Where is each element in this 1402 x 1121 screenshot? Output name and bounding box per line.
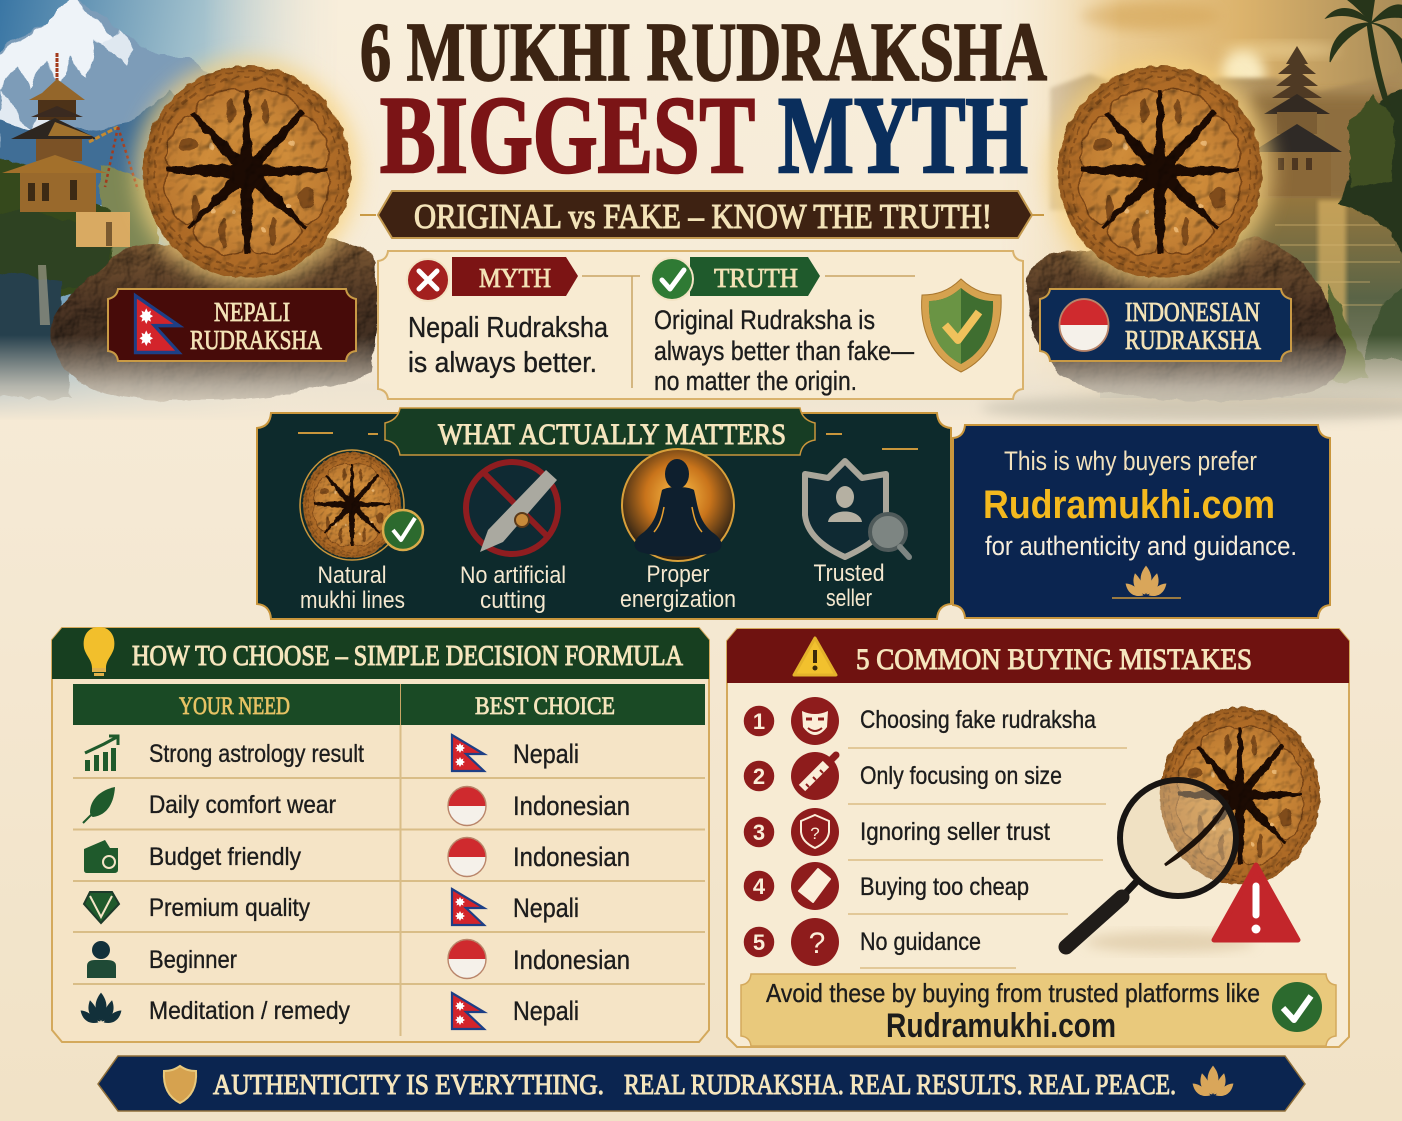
table header: BEST CHOICE bbox=[475, 693, 615, 720]
palm bbox=[1326, 0, 1402, 105]
row: premium quality: Premium quality bbox=[149, 894, 310, 922]
panel: what actually matters bbox=[257, 408, 951, 619]
table header: YOUR NEED bbox=[179, 693, 290, 720]
right rock bbox=[1027, 237, 1345, 401]
mistake 2: 2 bbox=[753, 764, 765, 789]
mistake 4 bbox=[743, 862, 1029, 910]
mistake 4: 4 bbox=[753, 874, 766, 899]
footer banner bbox=[98, 1056, 1305, 1111]
header tab: WHAT ACTUALLY MATTERS bbox=[438, 418, 786, 451]
myth text: is always better. bbox=[408, 347, 597, 379]
mistake 4: Buying too cheap bbox=[860, 873, 1029, 901]
label: indonesian rudraksha: RUDRAKSHA bbox=[1125, 325, 1261, 355]
myth text bbox=[408, 312, 609, 379]
row: meditation remedy: Meditation / remedy bbox=[149, 997, 350, 1025]
row: strong astrology result bbox=[85, 735, 579, 771]
fog band bbox=[0, 335, 1402, 420]
panel: why buyers prefer bbox=[953, 425, 1330, 618]
truth text bbox=[654, 305, 914, 396]
item: natural mukhi lines: Natural bbox=[318, 562, 386, 589]
item: proper energization: energization bbox=[620, 586, 736, 613]
mistake 5: 5 bbox=[753, 930, 765, 955]
footer banner: AUTHENTICITY IS EVERYTHING. bbox=[213, 1070, 604, 1101]
item: natural mukhi lines bbox=[300, 450, 423, 614]
temple bbox=[1252, 46, 1342, 196]
truth text: no matter the origin. bbox=[654, 366, 857, 396]
truth text: Original Rudraksha is bbox=[654, 305, 875, 335]
item: natural mukhi lines: mukhi lines bbox=[300, 587, 405, 614]
myth text: Nepali Rudraksha bbox=[408, 312, 609, 344]
item: no artificial cutting: cutting bbox=[480, 587, 546, 614]
panel header bbox=[52, 628, 709, 679]
callout: trusted platforms: Rudramukhi.com bbox=[886, 1007, 1116, 1045]
mistake 5: No guidance bbox=[860, 928, 981, 956]
left scene: mountains and pagoda bbox=[0, 0, 308, 412]
row: beginner: Beginner bbox=[149, 946, 237, 974]
row: premium quality bbox=[84, 889, 579, 925]
mistake 1 bbox=[743, 697, 1096, 745]
item: proper energization bbox=[620, 449, 736, 613]
mistake 2 bbox=[743, 752, 1062, 800]
left rock bbox=[51, 237, 378, 400]
panel: why buyers prefer: for authenticity and guidance. bbox=[985, 531, 1297, 561]
label: indonesian rudraksha: INDONESIAN bbox=[1125, 297, 1260, 327]
icon: shield bbox=[922, 279, 1001, 372]
mistake 3: 3 bbox=[753, 820, 765, 845]
icon: lightbulb bbox=[84, 627, 114, 676]
item: no artificial cutting: No artificial bbox=[460, 562, 566, 589]
label: nepali rudraksha bbox=[108, 289, 356, 361]
item: no artificial cutting bbox=[460, 462, 566, 614]
row: meditation remedy bbox=[81, 993, 579, 1029]
panel: how to choose bbox=[52, 627, 709, 1042]
row: strong astrology result: Strong astrology result bbox=[149, 740, 364, 768]
mistake 1: Choosing fake rudraksha bbox=[860, 706, 1096, 734]
panel: why buyers prefer: Rudramukhi.com bbox=[983, 483, 1275, 527]
row: premium quality: Nepali bbox=[513, 893, 579, 923]
row: strong astrology result: Nepali bbox=[513, 739, 579, 769]
myth tag bbox=[407, 257, 578, 301]
row: budget friendly: Indonesian bbox=[513, 842, 630, 872]
icon: shield bbox=[164, 1066, 196, 1103]
header tab bbox=[298, 408, 918, 455]
panel: why buyers prefer: This is why buyers prefer bbox=[1004, 446, 1257, 476]
jungle bbox=[1325, 85, 1402, 380]
row: beginner bbox=[87, 940, 630, 978]
icon: lotus bbox=[1193, 1066, 1233, 1096]
panel: common buying mistakes bbox=[727, 629, 1349, 1047]
row: budget friendly bbox=[84, 838, 630, 876]
panel header: HOW TO CHOOSE – SIMPLE DECISION FORMULA bbox=[132, 641, 684, 672]
item: trusted seller: Trusted bbox=[814, 560, 884, 587]
row: daily comfort wear: Indonesian bbox=[513, 791, 630, 821]
footer banner: REAL RUDRAKSHA. REAL RESULTS. REAL PEACE. bbox=[624, 1070, 1176, 1101]
mistake 3: ? bbox=[810, 824, 820, 843]
title: BIGGEST bbox=[380, 74, 755, 196]
subtitle banner: ORIGINAL vs FAKE – KNOW THE TRUTH! bbox=[414, 197, 992, 236]
mistake 2: Only focusing on size bbox=[860, 762, 1062, 790]
mistake 5 bbox=[743, 918, 981, 966]
row: daily comfort wear: Daily comfort wear bbox=[149, 791, 336, 819]
label: nepali rudraksha: NEPALI bbox=[214, 297, 290, 327]
callout: trusted platforms bbox=[741, 974, 1336, 1046]
truth tag bbox=[651, 257, 820, 300]
icon: warning triangle bbox=[1214, 865, 1298, 940]
row: daily comfort wear bbox=[83, 786, 630, 826]
title: MYTH bbox=[778, 74, 1028, 196]
panel header: 5 COMMON BUYING MISTAKES bbox=[856, 643, 1252, 676]
truth tag: TRUTH bbox=[714, 263, 798, 293]
callout: trusted platforms: Avoid these by buying from trusted platforms like bbox=[766, 978, 1260, 1008]
item: trusted seller bbox=[805, 461, 909, 612]
table header bbox=[73, 684, 705, 725]
item: proper energization: Proper bbox=[646, 561, 710, 588]
mistake 3 bbox=[743, 808, 1050, 856]
label: nepali rudraksha: RUDRAKSHA bbox=[190, 325, 322, 355]
illustration: bead under magnifier bbox=[1066, 707, 1320, 952]
panel header bbox=[727, 629, 1349, 683]
row: beginner: Indonesian bbox=[513, 945, 630, 975]
mistake 1: 1 bbox=[753, 709, 765, 734]
truth text: always better than fake— bbox=[654, 336, 914, 366]
pagoda bbox=[2, 53, 138, 247]
right scene: sunset lake and temple bbox=[1031, 0, 1402, 406]
row: meditation remedy: Nepali bbox=[513, 996, 579, 1026]
title bbox=[360, 6, 1047, 196]
mistake 3: Ignoring seller trust bbox=[860, 818, 1050, 846]
icon: lotus bbox=[1112, 566, 1181, 598]
panel: myth vs truth bbox=[378, 251, 1023, 399]
item: trusted seller: seller bbox=[826, 585, 872, 612]
title: 6 MUKHI RUDRAKSHA bbox=[360, 6, 1047, 99]
mistake 5: ? bbox=[809, 927, 825, 960]
bead: indonesian bbox=[1048, 58, 1272, 286]
myth tag: MYTH bbox=[479, 263, 551, 293]
row: budget friendly: Budget friendly bbox=[149, 843, 301, 871]
label: indonesian rudraksha bbox=[1040, 289, 1291, 361]
bead: nepali bbox=[135, 58, 359, 286]
